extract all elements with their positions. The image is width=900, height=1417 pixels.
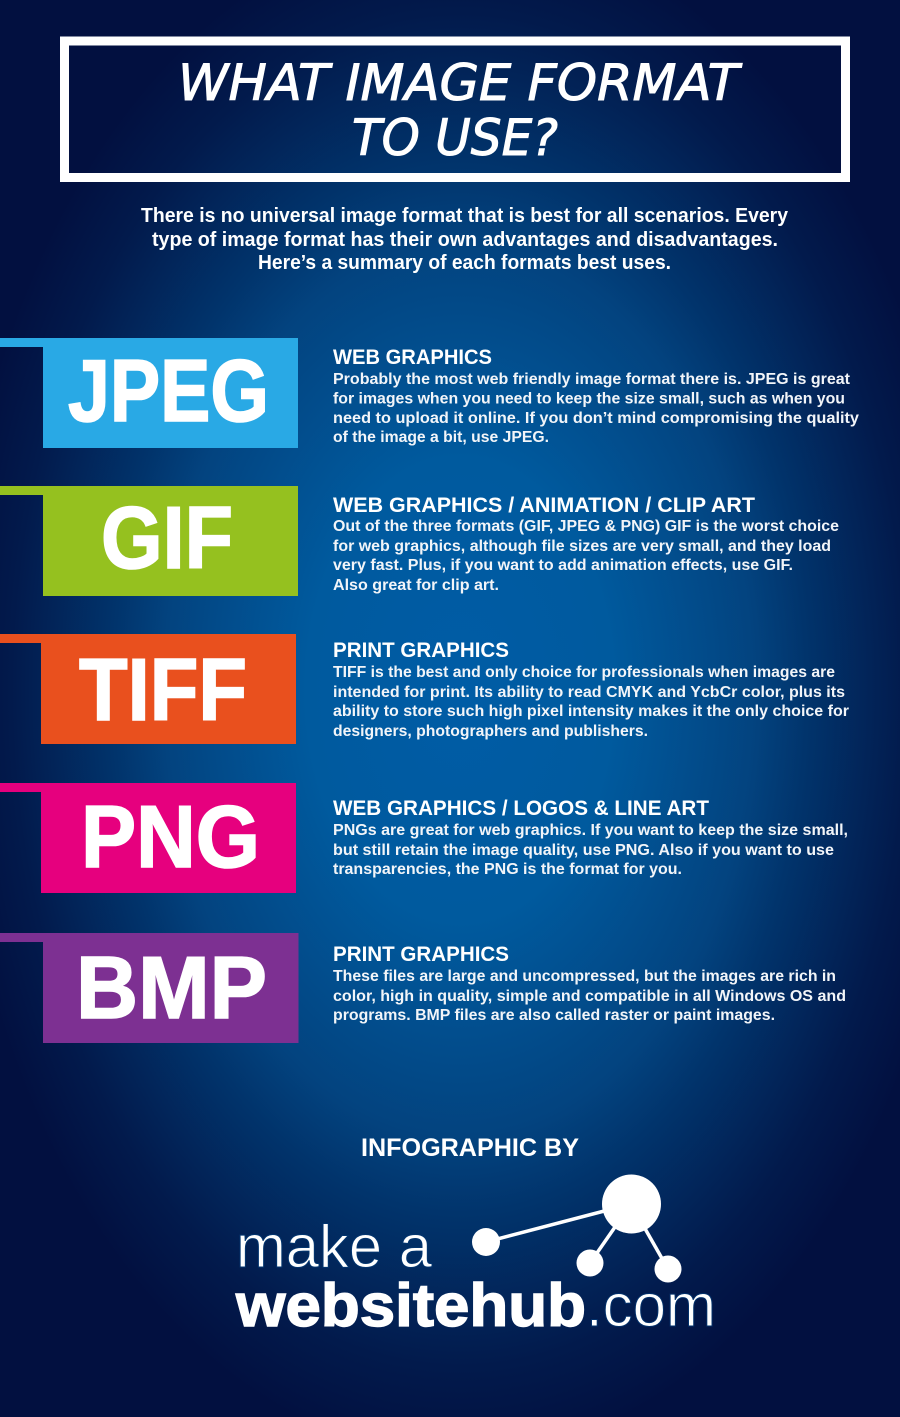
- BMP description: [333, 943, 846, 1024]
- credit heading: INFOGRAPHIC BY: [361, 1134, 579, 1162]
- panel: TIFF: [0, 634, 849, 744]
- GIF description: WEB GRAPHICS / ANIMATION / CLIP ART: [333, 494, 755, 517]
- PNG description: [333, 797, 848, 878]
- JPEG description: for images when you need to keep the size small, such as when you: [333, 390, 845, 408]
- PNG description: transparencies, the PNG is the format for you.: [333, 861, 682, 878]
- TIFF description: TIFF is the best and only choice for professionals when images are: [333, 664, 835, 681]
- panel: PNG: [0, 783, 848, 893]
- GIF label: GIF: [101, 488, 233, 587]
- intro text: Here’s a summary of each formats best uses.: [258, 252, 671, 274]
- panel: BMP: [0, 933, 846, 1043]
- GIF description: Also great for clip art.: [333, 577, 499, 594]
- BMP label block: [0, 933, 298, 1043]
- title: WHAT IMAGE FORMAT: [178, 54, 743, 112]
- logo text: websitehub: websitehub: [235, 1272, 586, 1339]
- BMP label: BMP: [76, 938, 267, 1037]
- JPEG label: JPEG: [68, 341, 269, 440]
- PNG label: PNG: [81, 787, 260, 886]
- TIFF description: ability to store such high pixel intensity makes it the only choice for: [333, 703, 849, 720]
- GIF description: [333, 494, 839, 594]
- icon: network nodes: [472, 1174, 682, 1282]
- intro text: There is no universal image format that is best for all scenarios. Every: [141, 205, 789, 227]
- PNG label block: [0, 783, 296, 893]
- PNG description: WEB GRAPHICS / LOGOS & LINE ART: [333, 797, 709, 820]
- title frame: [64, 41, 846, 178]
- TIFF description: intended for print. Its ability to read CMYK and YcbCr color, plus its: [333, 684, 845, 701]
- BMP description: color, high in quality, simple and compatible in all Windows OS and: [333, 988, 846, 1005]
- GIF label block: [0, 486, 298, 596]
- GIF description: for web graphics, although file sizes are very small, and they load: [333, 538, 831, 555]
- PNG description: PNGs are great for web graphics. If you want to keep the size small,: [333, 822, 848, 839]
- JPEG description: need to upload it online. If you don’t mind compromising the quality: [333, 410, 859, 427]
- GIF description: very fast. Plus, if you want to add animation effects, use GIF.: [333, 557, 793, 574]
- BMP description: These files are large and uncompressed, but the images are rich in: [333, 968, 836, 985]
- JPEG description: Probably the most web friendly image format there is. JPEG is great: [333, 371, 850, 388]
- TIFF description: [333, 639, 849, 740]
- panel: GIF: [0, 486, 839, 596]
- intro text: type of image format has their own advantages and disadvantages.: [152, 229, 778, 251]
- panel: JPEG: [0, 338, 859, 448]
- title: TO USE?: [352, 109, 558, 167]
- JPEG description: WEB GRAPHICS: [333, 346, 492, 369]
- TIFF description: designers, photographers and publishers.: [333, 723, 648, 740]
- logo: [235, 1174, 716, 1339]
- TIFF label block: [0, 634, 296, 744]
- PNG description: but still retain the image quality, use PNG. Also if you want to use: [333, 842, 834, 859]
- intro text: [141, 205, 789, 274]
- logo text: .com: .com: [586, 1272, 716, 1339]
- BMP description: programs. BMP files are also called raster or paint images.: [333, 1007, 775, 1024]
- JPEG description: of the image a bit, use JPEG.: [333, 429, 549, 446]
- JPEG label block: [0, 338, 298, 448]
- BMP description: PRINT GRAPHICS: [333, 943, 509, 966]
- TIFF description: PRINT GRAPHICS: [333, 639, 509, 662]
- JPEG description: [333, 346, 859, 446]
- logo text: make a: make a: [236, 1213, 433, 1280]
- GIF description: Out of the three formats (GIF, JPEG & PNG) GIF is the worst choice: [333, 518, 839, 535]
- title: [178, 54, 743, 167]
- TIFF label: TIFF: [79, 640, 247, 739]
